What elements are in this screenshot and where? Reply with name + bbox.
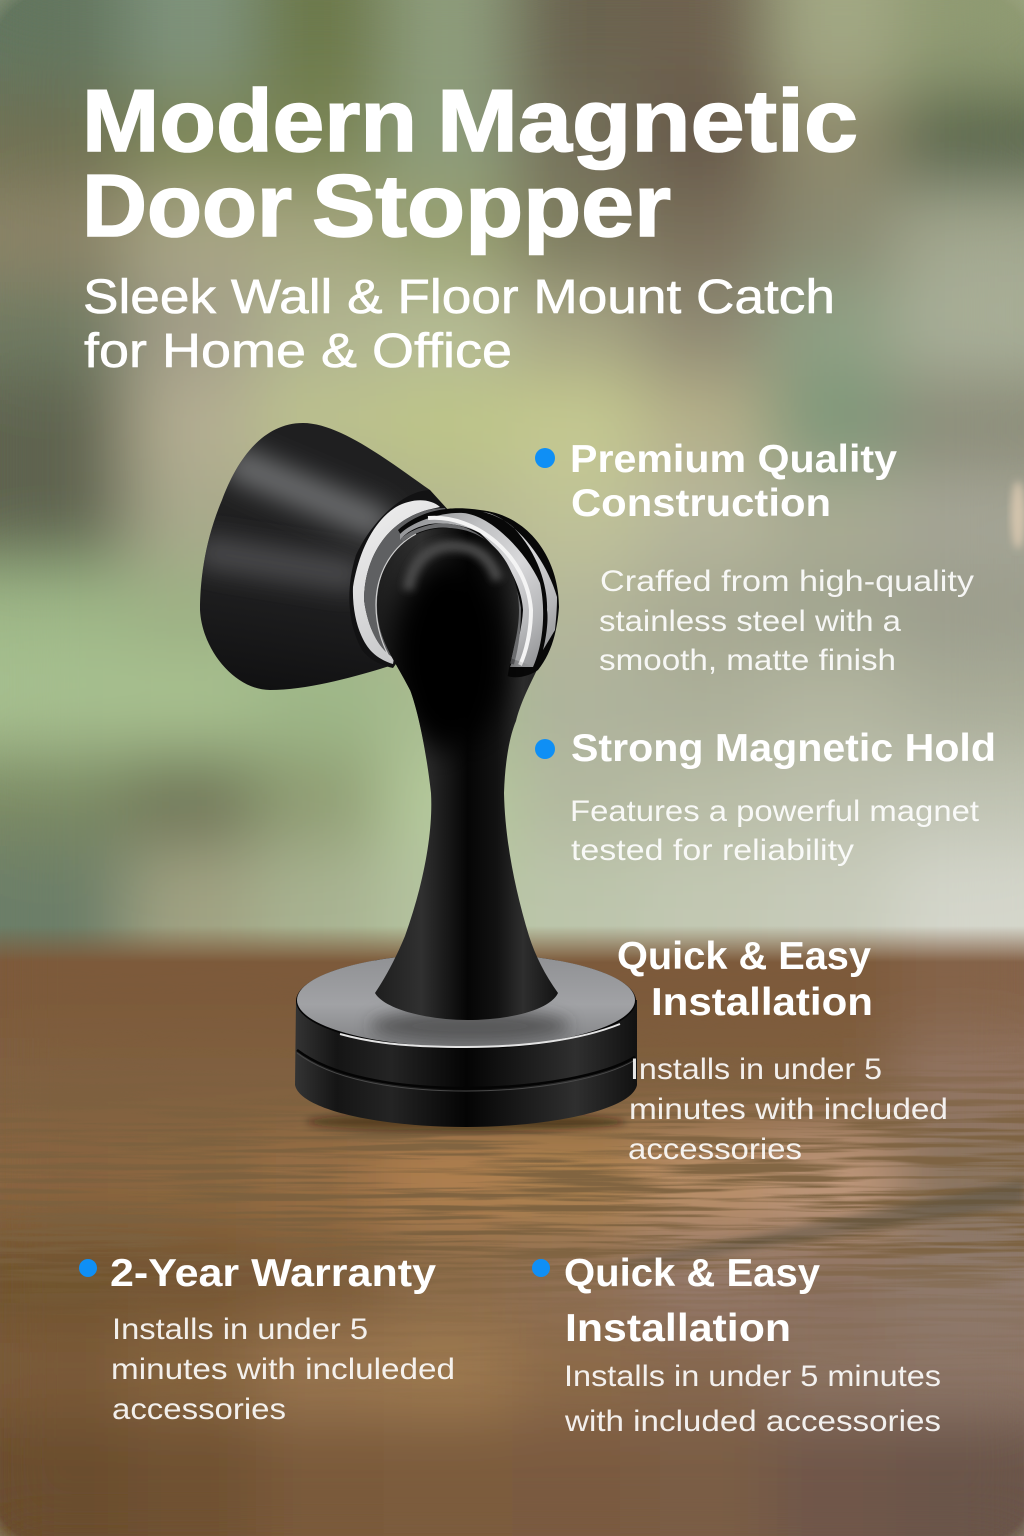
description: accessories <box>112 1393 286 1426</box>
description <box>564 1360 941 1438</box>
description: minutes with included <box>629 1093 948 1126</box>
contact shadow on table <box>306 1113 626 1131</box>
description: Craffed from high-quality <box>600 565 974 598</box>
description: tested for reliability <box>571 834 854 867</box>
heading: Strong Magnetic Hold <box>571 727 996 770</box>
description: Installs in under 5 <box>112 1313 368 1346</box>
description: accessories <box>628 1133 802 1166</box>
feature: 2-year warranty <box>79 1252 455 1426</box>
description: Installs in under 5 <box>630 1053 882 1086</box>
heading: Premium Quality <box>570 438 897 481</box>
heading <box>617 935 873 1024</box>
heading: Construction <box>571 482 831 525</box>
title: Modern <box>82 71 417 170</box>
description: with included accessories <box>564 1405 941 1438</box>
feature: premium quality construction <box>535 438 974 677</box>
wall cone <box>200 423 430 690</box>
subtitle: Sleek Wall & Floor Mount Catch <box>83 271 835 324</box>
collar ring <box>349 490 470 668</box>
description: stainless steel with a <box>599 605 901 638</box>
bullet <box>535 448 555 468</box>
product: magnetic door stopper <box>200 423 637 1131</box>
heading: Quick & Easy <box>564 1252 820 1295</box>
heading <box>564 1252 820 1350</box>
description: minutes with incluleded <box>111 1353 455 1386</box>
feature: quick and easy installation (right of base) <box>617 935 948 1166</box>
description: Installs in under 5 minutes <box>564 1360 941 1393</box>
title <box>82 71 858 255</box>
lower stem <box>375 640 558 1020</box>
bullet <box>79 1259 97 1277</box>
description <box>599 565 974 677</box>
description: smooth, matte finish <box>599 644 896 677</box>
knob head <box>376 528 519 750</box>
description <box>628 1053 948 1166</box>
subtitle: for Home & Office <box>84 325 512 378</box>
feature: strong magnetic hold <box>535 727 996 867</box>
description <box>111 1313 455 1426</box>
head ring <box>398 508 559 677</box>
heading: Installation <box>651 981 873 1024</box>
title: Magnetic <box>437 71 858 170</box>
title: Door <box>82 156 292 255</box>
title: Stopper <box>312 156 671 255</box>
heading: 2-Year Warranty <box>110 1252 436 1295</box>
description <box>570 795 980 867</box>
heading: Installation <box>565 1307 791 1350</box>
description: Features a powerful magnet <box>570 795 980 828</box>
bullet <box>535 739 555 759</box>
heading: Quick & Easy <box>617 935 871 978</box>
base disc <box>295 953 637 1127</box>
subtitle <box>83 271 835 378</box>
heading <box>570 438 897 525</box>
feature: quick and easy installation (bottom right) <box>532 1252 941 1438</box>
bullet <box>532 1259 550 1277</box>
